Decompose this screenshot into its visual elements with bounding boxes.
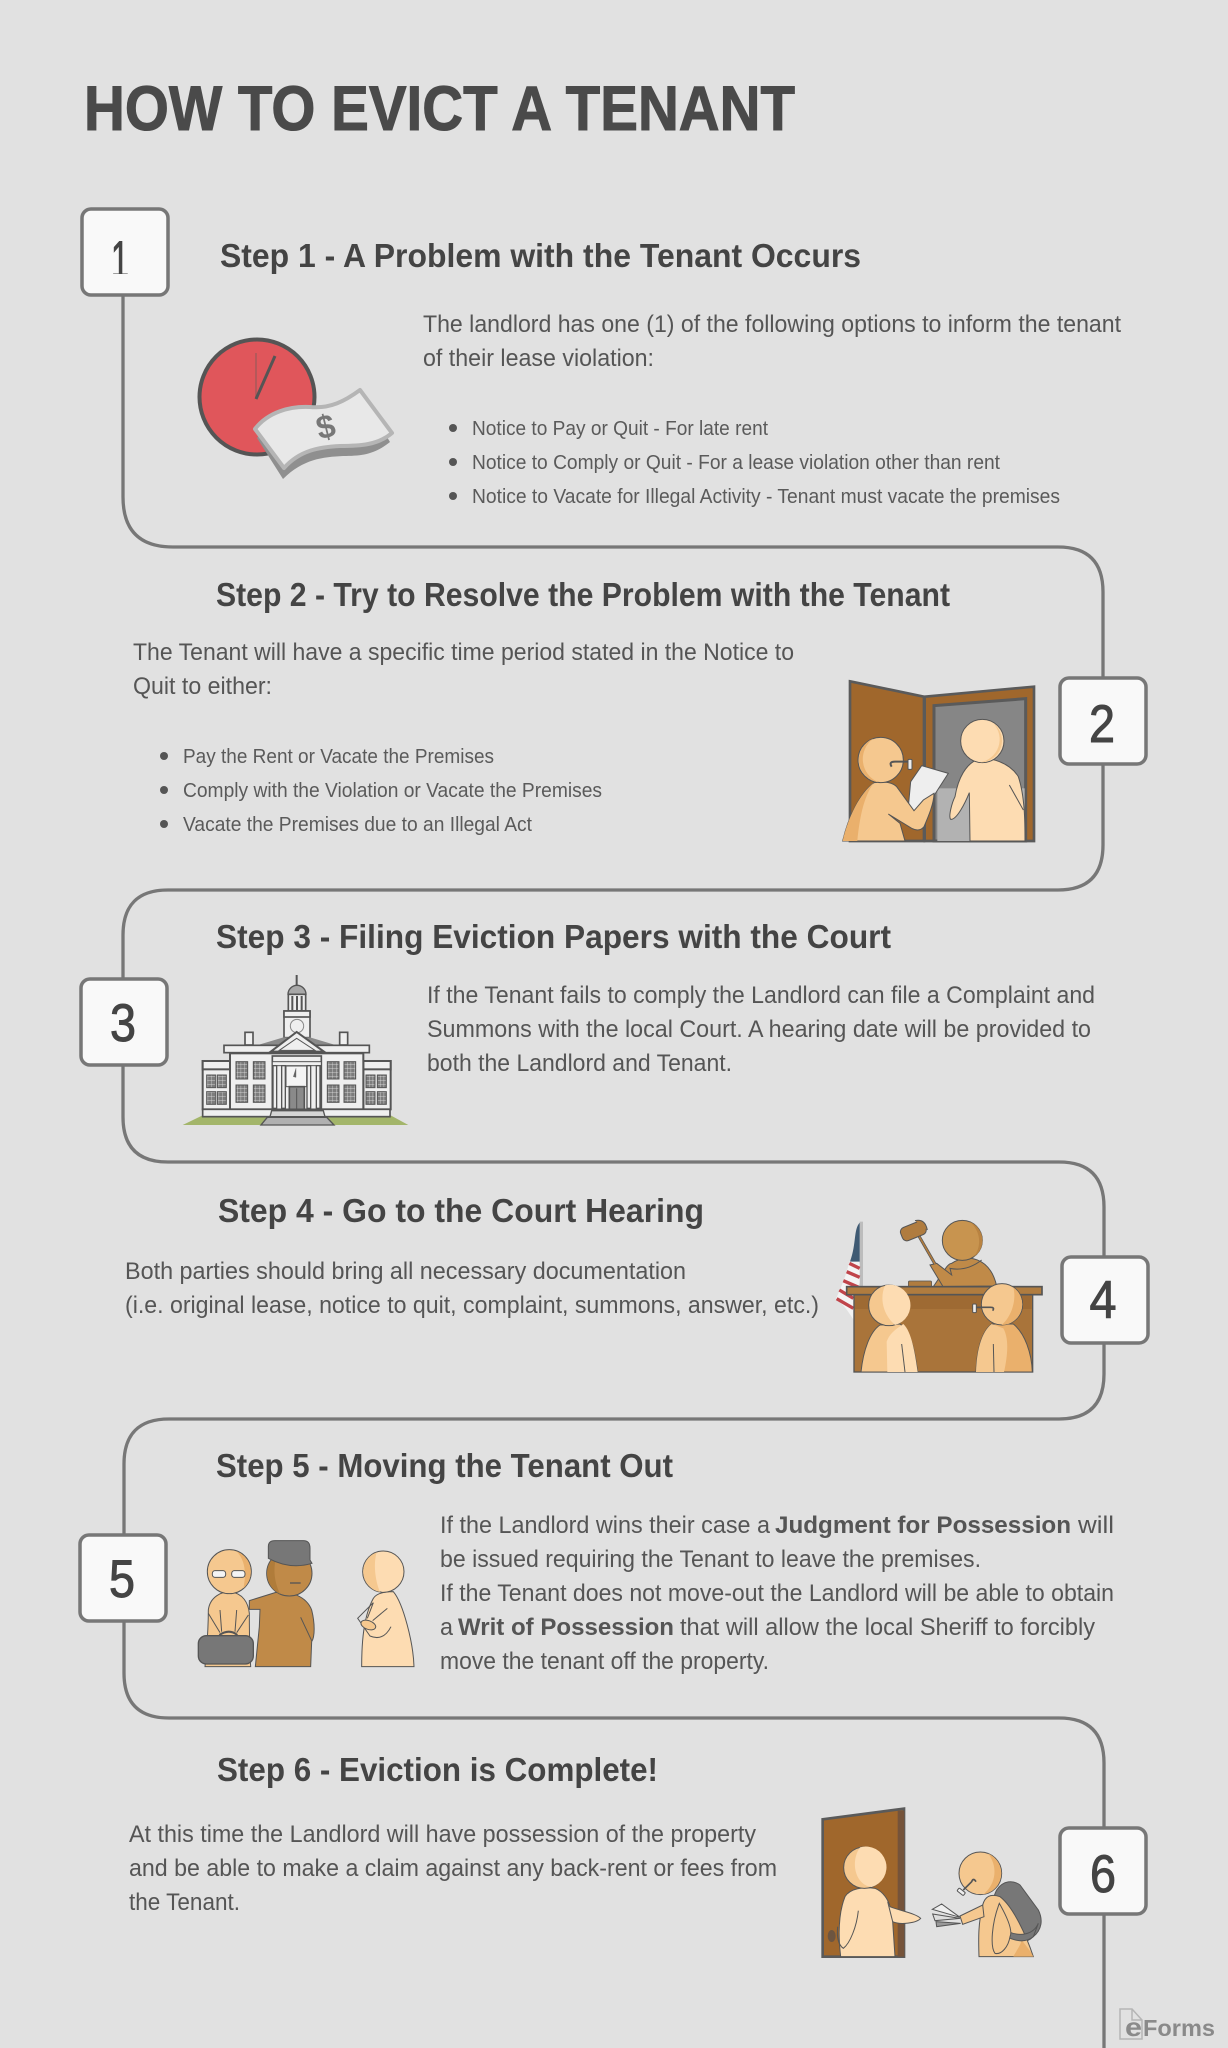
logo: eForms <box>1120 2009 1215 2042</box>
step 5 body text: be issued requiring the Tenant to leave the premises. <box>440 1546 981 1573</box>
step 5 body text: If the Tenant does not move-out the Landlord will be able to obtain <box>440 1580 1114 1607</box>
step 1 bullet list <box>449 417 1060 508</box>
step 4 body text: Both parties should bring all necessary documentation <box>125 1258 686 1285</box>
step 4 body text: (i.e. original lease, notice to quit, complaint, summons, answer, etc.) <box>125 1292 819 1319</box>
step 5 heading: Step 5 - Moving the Tenant Out <box>216 1447 673 1484</box>
step 2 number box <box>1060 678 1146 764</box>
step 5 body text: If the Landlord wins their case a <box>440 1512 771 1539</box>
step 1 bullet list: Notice to Vacate for Illegal Activity - Tenant must vacate the premises <box>472 485 1060 508</box>
icon: tenant leaving and handing over keys <box>823 1809 1041 1957</box>
step 2 bullet list <box>160 745 602 836</box>
step 2 intro text: The Tenant will have a specific time period stated in the Notice to <box>133 639 794 666</box>
icon: judge and courtroom <box>836 1220 1042 1372</box>
step 2 number box: 2 <box>1089 695 1115 754</box>
step 6 body text: the Tenant. <box>129 1889 240 1916</box>
step 6 number box <box>1060 1828 1146 1914</box>
step 2 bullet list: Pay the Rent or Vacate the Premises <box>183 745 494 768</box>
step 5 number box: 5 <box>109 1550 135 1609</box>
icon: tenant at door with notice <box>843 681 1034 841</box>
step 6 body text: and be able to make a claim against any back-rent or fees from <box>129 1855 777 1882</box>
title: HOW TO EVICT A TENANT <box>84 74 795 144</box>
step 2 bullet list: Vacate the Premises due to an Illegal Act <box>183 813 532 836</box>
step 6 body text: At this time the Landlord will have possession of the property <box>129 1821 756 1848</box>
step 4 number box <box>1062 1257 1148 1343</box>
step 5 body text: will <box>1077 1512 1114 1539</box>
step 6 heading: Step 6 - Eviction is Complete! <box>217 1751 658 1788</box>
step 3 heading: Step 3 - Filing Eviction Papers with the Court <box>216 918 891 955</box>
step 2 bullet list: Comply with the Violation or Vacate the Premises <box>183 779 602 802</box>
panel: step 3 <box>81 918 1095 1125</box>
step 6 body text <box>129 1821 777 1916</box>
step 5 body text: Writ of Possession <box>458 1614 674 1641</box>
step 1 intro text <box>423 311 1121 372</box>
panel: step 1 <box>82 209 1121 508</box>
step 1 number box <box>82 209 168 295</box>
step 2 intro text: Quit to either: <box>133 673 272 700</box>
step 1 bullet list: Notice to Pay or Quit - For late rent <box>472 417 768 440</box>
panel: step 4 <box>125 1192 1148 1372</box>
step 2 intro text <box>133 639 794 700</box>
step 1 intro text: The landlord has one (1) of the following options to inform the tenant <box>423 311 1121 338</box>
step 4 body text <box>125 1258 819 1319</box>
step 3 number box <box>81 979 167 1065</box>
step 3 body text: Summons with the local Court. A hearing date will be provided to <box>427 1016 1091 1043</box>
panel: step 2 <box>133 576 1146 841</box>
connector line through the steps <box>123 295 1104 2048</box>
icon: sheriff escorting tenant with suitcase <box>198 1541 414 1667</box>
step 3 number box: 3 <box>110 994 136 1053</box>
panel: step 5 <box>80 1447 1114 1675</box>
step 5 body text: a <box>440 1614 454 1641</box>
step 3 body text: If the Tenant fails to comply the Landlord can file a Complaint and <box>427 982 1095 1009</box>
step 5 body text: Judgment for Possession <box>775 1512 1071 1539</box>
logo: eForms: e <box>1125 2012 1142 2042</box>
icon: clock and money <box>200 340 392 479</box>
step 3 body text: both the Landlord and Tenant. <box>427 1050 732 1077</box>
step 6 number box: 6 <box>1090 1845 1116 1904</box>
step 5 number box <box>80 1535 166 1621</box>
icon: courthouse <box>183 975 408 1125</box>
panel: step 6 <box>129 1751 1146 1957</box>
step 5 body text: that will allow the local Sheriff to forcibly <box>680 1614 1095 1641</box>
logo: eForms: Forms <box>1143 2015 1215 2041</box>
step 1 number box: 1 <box>111 231 129 290</box>
step 1 heading: Step 1 - A Problem with the Tenant Occurs <box>220 237 861 274</box>
step 1 bullet list: Notice to Comply or Quit - For a lease violation other than rent <box>472 451 1000 474</box>
step 4 number box: 4 <box>1090 1271 1116 1330</box>
step 1 intro text: of their lease violation: <box>423 345 654 372</box>
step 2 heading: Step 2 - Try to Resolve the Problem with the Tenant <box>216 576 950 613</box>
step 3 body text <box>427 982 1095 1077</box>
step 4 heading: Step 4 - Go to the Court Hearing <box>218 1192 704 1229</box>
step 5 body text <box>440 1512 1114 1675</box>
icon: clock and money: $ <box>312 406 339 447</box>
step 5 body text: move the tenant off the property. <box>440 1648 769 1675</box>
